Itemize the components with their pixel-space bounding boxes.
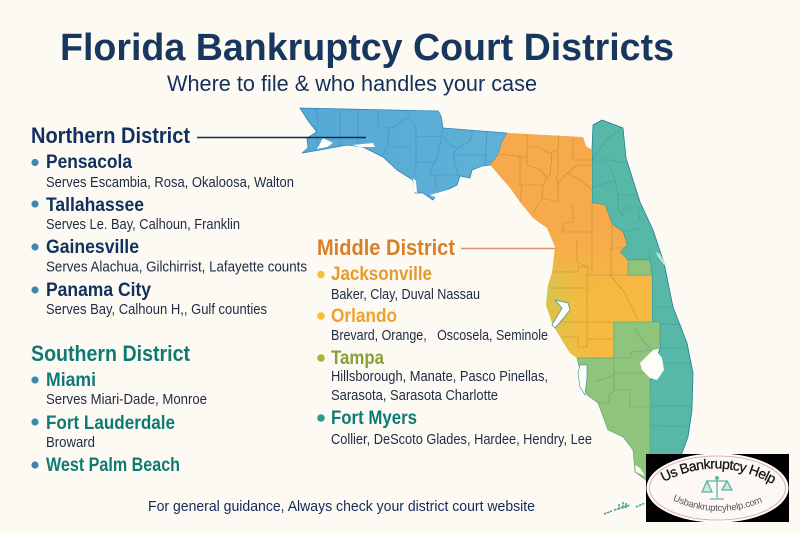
entry: Miami: Serves Miari-Dade, Monroe (46, 391, 207, 408)
entry: Miami: Miami (46, 370, 96, 391)
entry: Pensacola (31, 152, 294, 191)
entry: Fort Myers: Collier, DeScoto Glades, Hardee, Hendry, Lee (331, 431, 592, 448)
panel: Middle District (317, 235, 592, 448)
entry: Orlando: Brevard, Orange, Oscosela, Seminole (331, 327, 548, 344)
heading: Middle District: Middle District (317, 235, 456, 260)
title: Florida Bankruptcy Court Districts (60, 27, 674, 69)
region: Southern District east coast (592, 120, 693, 480)
entry: Tampa: Sarasota, Sarasota Charlotte (331, 387, 498, 404)
logo: Us Bankruptcy Help: Us Bankruptcy Help (660, 458, 775, 484)
entry: Pensacola: Serves Escambia, Rosa, Okaloosa, Walton (46, 174, 294, 191)
entry: Orlando (317, 306, 548, 344)
entry: Jacksonville (317, 264, 480, 303)
entry: Gainesville: Gainesville (46, 237, 139, 258)
entry: Fort Lauderdale: Broward (46, 434, 95, 451)
entry: Fort Lauderdale (31, 413, 175, 451)
heading: Northern District: Northern District (31, 123, 191, 148)
subtitle: Where to file & who handles your case (167, 71, 537, 96)
entry: Tallahassee: Tallahassee (46, 195, 144, 216)
entry: Miami (31, 370, 207, 408)
entry: Tampa: Hillsborough, Manate, Pasco Pinellas, (331, 368, 548, 385)
entry: Gainesville: Serves Alachua, Gilchirrist, Lafayette counts (46, 258, 307, 276)
panel: Northern District (31, 123, 307, 318)
entry: Tampa (317, 348, 548, 404)
entry: Tallahassee (31, 195, 240, 233)
entry: Panama City: Panama City (46, 280, 151, 301)
icon: scales of justice (702, 477, 732, 499)
region: Middle District (490, 133, 652, 358)
region: Northern District panhandle (300, 108, 507, 200)
entry: Tampa: Tampa (331, 348, 384, 369)
map: Florida districts (300, 108, 693, 514)
entry: Gainesville (31, 237, 307, 276)
logo: Us Bankruptcy Help (646, 454, 789, 522)
entry: Fort Myers (317, 408, 592, 448)
entry: West Palm Beach: West Palm Beach (46, 455, 180, 476)
pointer line: Northern District (197, 136, 366, 138)
entry: Panama City: Serves Bay, Calhoun H,, Gulf counties (46, 301, 267, 318)
heading: Southern District: Southern District (31, 341, 191, 366)
entry: Pensacola: Pensacola (46, 152, 132, 173)
footer note: For general guidance, Always check your district court website (148, 498, 535, 515)
Florida Keys (604, 502, 645, 514)
entry: Panama City (31, 280, 267, 318)
pointer line: Middle District (461, 248, 556, 250)
entry: Tallahassee: Serves Le. Bay, Calhoun, Franklin (46, 216, 240, 233)
entry: Orlando: Orlando (331, 306, 397, 327)
region: Fort Myers green area (577, 260, 664, 480)
entry: Fort Lauderdale: Fort Lauderdale (46, 413, 175, 434)
logo: Us Bankruptcy Help: Usbankruptcyhelp.com (674, 494, 762, 513)
panel: Southern District (31, 341, 207, 476)
entry: Fort Myers: Fort Myers (331, 408, 417, 429)
entry: Jacksonville: Baker, Clay, Duval Nassau (331, 286, 480, 303)
entry: Jacksonville: Jacksonville (331, 264, 432, 285)
